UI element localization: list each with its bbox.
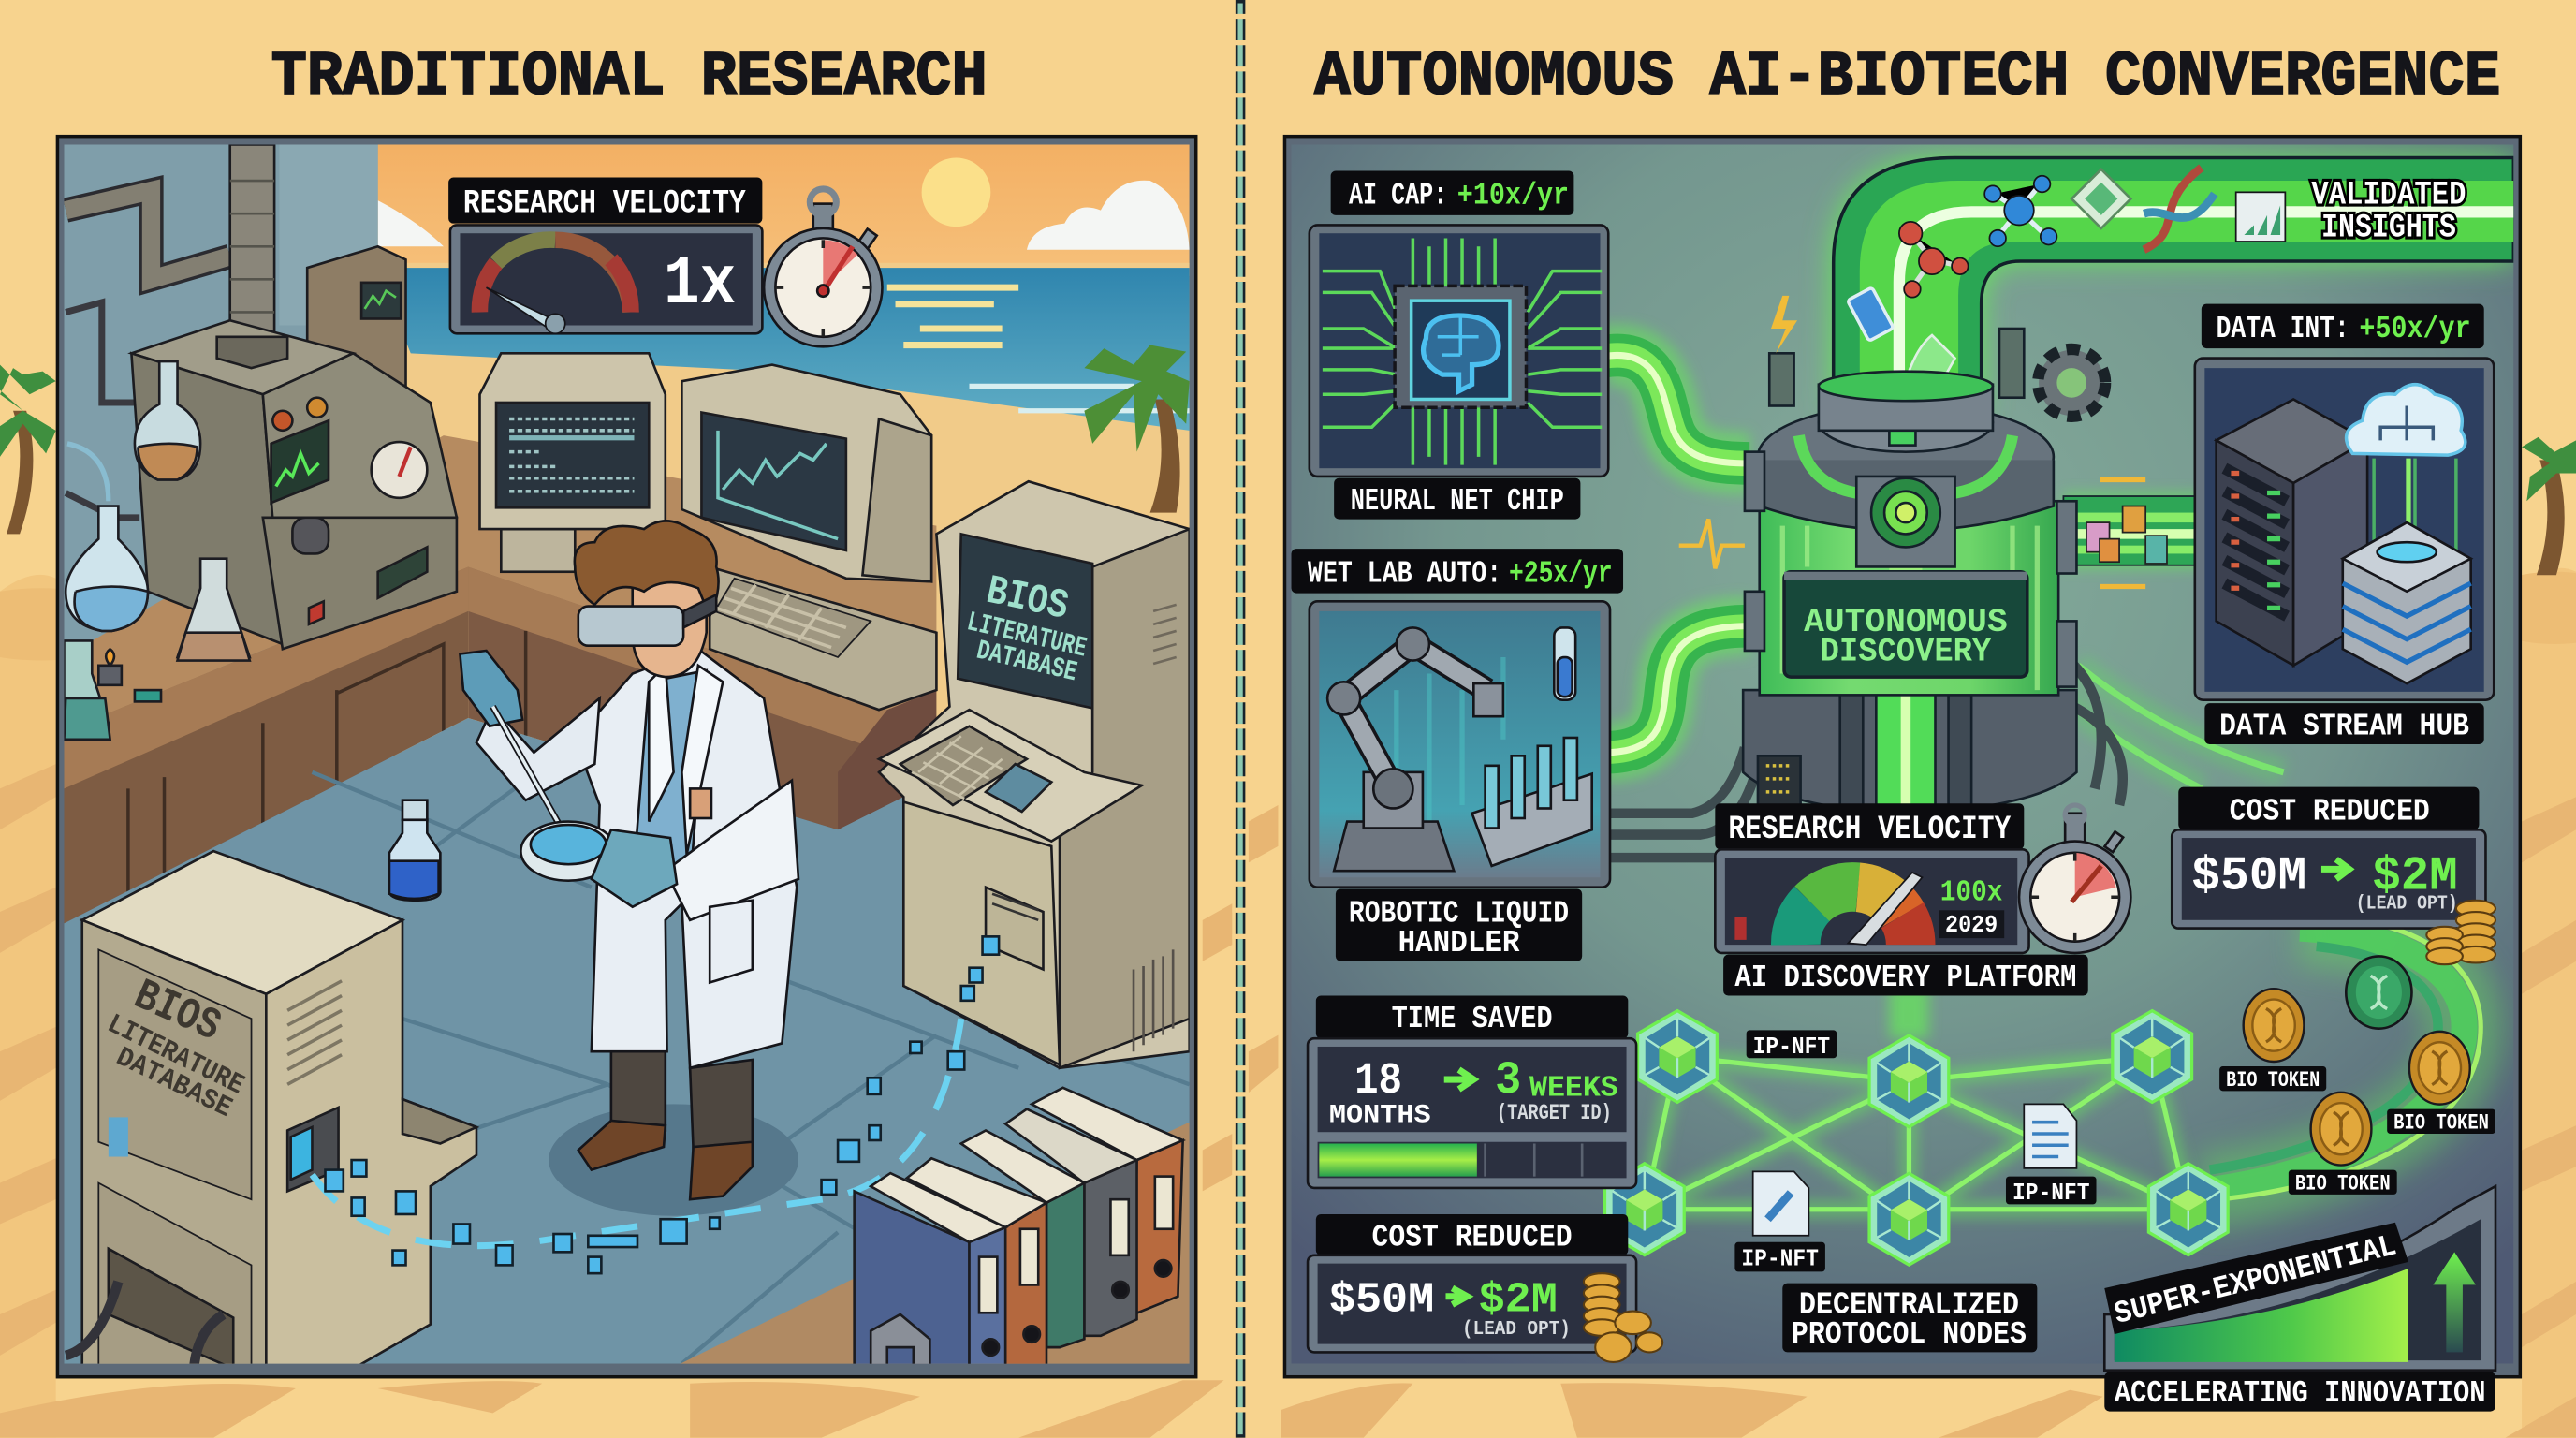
label: validated insights: VALIDATED	[2311, 177, 2466, 214]
reactor label	[1784, 572, 2027, 677]
database screen label: DATABASE	[973, 635, 1080, 688]
flow pipe: data hub to reactor	[2063, 479, 2211, 587]
flowing data squares	[312, 936, 999, 1273]
bio tokens	[2219, 956, 2496, 1196]
reagent bottle	[389, 800, 440, 901]
cables behind gauge	[1603, 649, 2123, 858]
icon: vial	[1848, 287, 1894, 341]
chart: super-exponential growth	[2104, 1186, 2496, 1371]
protocol node: top left	[1638, 1011, 1717, 1102]
callout: cost reduced left: $50M	[1329, 1276, 1434, 1325]
monitor one	[479, 353, 666, 572]
palm tree: left margin	[0, 365, 56, 534]
callout: research velocity 100x: 2029	[1945, 911, 1998, 939]
label: validated insights	[2311, 177, 2466, 247]
icon: IP-NFT chain document	[1753, 1171, 1808, 1236]
flow pipe: neural chip to reactor	[1603, 355, 1749, 463]
bio tokens: BIO TOKEN	[2226, 1068, 2320, 1093]
panel: data stream hub: +50x/yr	[2359, 312, 2471, 347]
icon: stopwatch	[764, 189, 882, 346]
callout: cost reduced top right	[2172, 787, 2485, 929]
glassware	[64, 361, 250, 740]
gauge callout: research velocity 1x	[448, 178, 762, 333]
icon: report chart	[2236, 192, 2285, 242]
callout: cost reduced left	[1308, 1214, 1636, 1352]
callout: cost reduced top right: $2M	[2372, 850, 2458, 903]
label: decentralized protocol nodes: DECENTRALIZED	[1799, 1287, 2019, 1323]
title: traditional research: TRADITIONAL RESEARCH	[271, 42, 988, 113]
lab machine	[131, 144, 457, 649]
protocol node: bottom center	[1869, 1173, 1949, 1265]
chart: super-exponential growth: SUPER-EXPONENTIAL	[2111, 1228, 2400, 1333]
protocol node: bottom left	[1604, 1164, 1684, 1255]
label: accelerating innovation: ACCELERATING INNOVATION	[2115, 1376, 2485, 1412]
reactor label: DISCOVERY	[1821, 634, 1991, 671]
swirl	[2062, 666, 2481, 1199]
bio tokens: BIO TOKEN	[2393, 1111, 2489, 1136]
icon: coins top right	[2426, 901, 2496, 964]
panel: neural net chip	[1310, 171, 1608, 520]
icon: stopwatch fast	[2019, 805, 2130, 953]
callout: cost reduced top right: $50M	[2191, 850, 2306, 903]
icon: coins left	[1584, 1273, 1662, 1362]
panel: autonomous AI-biotech	[1284, 137, 2520, 1377]
icon: red molecule	[1899, 222, 1969, 298]
palm tree: right margin	[2522, 437, 2576, 575]
label: decentralized protocol nodes	[1782, 1284, 2037, 1353]
panel: robotic liquid handler	[1292, 549, 1623, 961]
monitor two	[681, 365, 936, 710]
label: decentralized protocol nodes: PROTOCOL NODES	[1792, 1317, 2027, 1353]
binders	[855, 1088, 1183, 1369]
icon: DNA	[2144, 168, 2215, 250]
callout: time saved: MONTHS	[1329, 1102, 1431, 1131]
network links	[1645, 986, 2188, 1219]
database terminal right	[879, 481, 1190, 1068]
callout: time saved: 18	[1354, 1057, 1402, 1107]
panel: robotic liquid handler: WET LAB AUTO:	[1308, 556, 1501, 592]
gauge callout: research velocity 1x: RESEARCH VELOCITY	[463, 184, 746, 222]
center divider	[1232, 0, 1247, 1438]
panel: neural net chip: NEURAL NET CHIP	[1351, 484, 1564, 520]
reactor label: AUTONOMOUS	[1804, 604, 2008, 641]
icon: lightning	[1771, 296, 1797, 353]
database screen label	[964, 568, 1090, 688]
database terminal left label: LITERATURE	[102, 1008, 249, 1101]
protocol node: top center	[1869, 1035, 1949, 1127]
callout: cost reduced top right: COST REDUCED	[2230, 795, 2430, 830]
panel: data stream hub	[2195, 304, 2494, 744]
icon: protein diamond	[2071, 169, 2130, 228]
database screen label: LITERATURE	[964, 606, 1090, 665]
panel: robotic liquid handler: HANDLER	[1398, 926, 1519, 961]
floor tiles	[64, 718, 1190, 1364]
label: IP-NFT bottom: IP-NFT	[1741, 1244, 1819, 1272]
callout: time saved: TIME SAVED	[1392, 1002, 1553, 1037]
callout: time saved: (TARGET ID)	[1497, 1101, 1612, 1125]
wall	[64, 144, 378, 670]
icon: organism outline	[1906, 335, 1955, 394]
icon: IP-NFT document	[2024, 1104, 2076, 1168]
label: validated insights: INSIGHTS	[2321, 210, 2456, 247]
protocol node: top right	[2113, 1011, 2192, 1102]
panel: neural net chip: +10x/yr	[1457, 179, 1569, 214]
label: AI discovery platform: AI DISCOVERY PLATFORM	[1734, 961, 2076, 996]
callout: time saved: WEEKS	[1530, 1073, 1618, 1106]
label: IP-NFT right: IP-NFT	[2012, 1179, 2089, 1207]
output pipe: validated insights	[1834, 157, 2513, 411]
callout: research velocity 100x: RESEARCH VELOCITY	[1728, 811, 2011, 848]
title: autonomous AI-biotech convergence: AUTONOMOUS AI-BIOTECH CONVERGENCE	[1314, 42, 2500, 113]
panel backdrop	[1292, 144, 2513, 1364]
panel: data stream hub: DATA STREAM HUB	[2219, 709, 2469, 744]
icon: blue molecule	[1984, 176, 2056, 246]
icon: pulse spark	[1679, 520, 1745, 568]
database terminal left label: BIOS	[126, 972, 227, 1053]
database terminal left label	[102, 972, 249, 1124]
database screen label: BIOS	[982, 568, 1073, 631]
callout: cost reduced left: $2M	[1479, 1276, 1558, 1325]
flow pipe: wet lab to reactor	[1603, 626, 1749, 753]
callout: cost reduced top right: (LEAD OPT)	[2356, 893, 2458, 916]
callout: time saved: 3	[1495, 1054, 1521, 1107]
database terminal left label: DATABASE	[111, 1041, 237, 1124]
beach scene backdrop	[64, 144, 1190, 756]
panel: traditional research lab	[57, 137, 1196, 1377]
callout: research velocity 100x: 100x	[1940, 877, 2003, 910]
panel: data stream hub: DATA INT:	[2217, 312, 2349, 347]
callout: research velocity 100x	[1715, 803, 2029, 953]
scientist	[460, 521, 798, 1199]
database terminal left	[66, 851, 476, 1369]
keyboard	[714, 579, 871, 657]
bookshelf floor corner	[670, 1123, 1190, 1369]
panel: robotic liquid handler: +25x/yr	[1509, 556, 1613, 592]
protocol node: bottom right	[2148, 1164, 2228, 1255]
panel: neural net chip: AI CAP:	[1349, 179, 1447, 214]
gauge callout: research velocity 1x: 1x	[664, 246, 736, 324]
icon: gear	[2039, 350, 2104, 416]
label: IP-NFT top: IP-NFT	[1753, 1033, 1830, 1061]
counter and cabinets	[64, 435, 936, 923]
reactor	[1743, 329, 2076, 818]
bio tokens: BIO TOKEN	[2295, 1172, 2391, 1196]
callout: cost reduced left: COST REDUCED	[1372, 1220, 1573, 1255]
callout: cost reduced left: (LEAD OPT)	[1462, 1318, 1571, 1341]
callout: time saved	[1308, 996, 1636, 1188]
panel: robotic liquid handler: ROBOTIC LIQUID	[1349, 897, 1569, 932]
